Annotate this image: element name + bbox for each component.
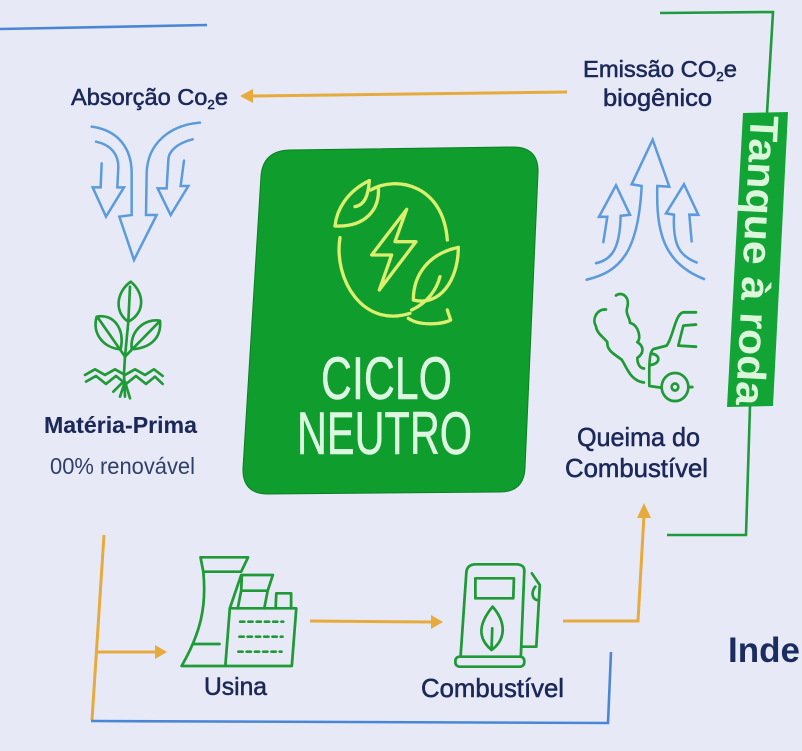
label: tanque a roda: Tanque à roda — [727, 115, 786, 407]
connector: bottom blue line — [91, 652, 611, 723]
text: emissao — [583, 56, 737, 112]
icon: plant — [85, 282, 163, 398]
text: emissao: e — [724, 56, 737, 82]
arrow: combustivel to queima — [563, 503, 651, 621]
text: combustivel: Combustível — [421, 673, 564, 703]
panel: ciclo neutro — [243, 147, 538, 494]
heading: neutro: NEUTRO — [297, 400, 472, 467]
text: materia-prima: Matéria-Prima — [44, 412, 197, 438]
text: cropped heading: Inde — [728, 631, 800, 670]
text: queima do combustivel: Queima do — [577, 422, 700, 452]
arrow: left vertical feed to usina — [92, 535, 167, 720]
text: absorcao: Absorção Co — [71, 84, 204, 110]
connector: green bracket top — [660, 12, 773, 113]
arrow: usina to combustivel — [310, 615, 443, 629]
text: usina: Usina — [204, 673, 267, 701]
icon: downward arrows — [92, 123, 200, 260]
text: queima do combustivel: Combustível — [565, 453, 708, 483]
text: emissao: biogênico — [603, 85, 712, 112]
icon: factory — [182, 557, 296, 666]
icon: fuel pump — [455, 564, 540, 667]
text: absorcao: 2 — [207, 97, 215, 112]
connector: green bracket bottom — [667, 406, 750, 535]
icon: leaves and lightning bolt — [335, 181, 458, 324]
connector: top-left blue line — [0, 25, 207, 29]
text: emissao: Emissão CO — [583, 56, 712, 82]
text: emissao: 2 — [716, 69, 724, 84]
icon: upward arrows — [587, 140, 704, 280]
icon: car with exhaust smoke — [594, 294, 696, 401]
arrow: emission to absorption — [240, 89, 567, 103]
heading: ciclo: CICLO — [321, 345, 452, 412]
text: queima do combustivel — [565, 422, 708, 483]
text: absorcao: e — [215, 84, 228, 110]
text: renovavel: 00% renovável — [50, 453, 195, 479]
